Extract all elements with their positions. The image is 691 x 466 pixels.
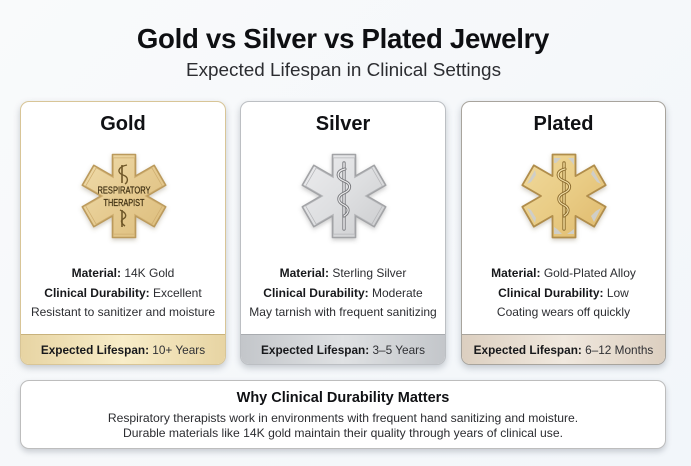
- panel: why clinical durability matters: [20, 380, 666, 449]
- panel: plated: [461, 101, 666, 365]
- icon: gold star of life badge: RESPIRATORY: [97, 184, 150, 196]
- text: clinical durability: Clinical Durability: Excellent: [44, 286, 202, 300]
- footer: expected lifespan: Expected Lifespan: 10+ Years: [41, 343, 205, 357]
- footer: expected lifespan: Expected Lifespan: 6–12 Months: [474, 343, 653, 357]
- subtitle: Expected Lifespan in Clinical Settings: [186, 60, 501, 81]
- panel: gold: [20, 101, 226, 365]
- icon: gold star of life badge: THERAPIST: [103, 197, 144, 209]
- text: note: Coating wears off quickly: [497, 305, 630, 319]
- text: material: Material: Gold-Plated Alloy: [491, 266, 636, 280]
- text: explanation: Respiratory therapists work in environments with frequent hand sanitizing and moisture.: [108, 411, 578, 425]
- text: explanation: Durable materials like 14K gold maintain their quality through years of clinical use.: [123, 426, 563, 440]
- text: clinical durability: Clinical Durability: Moderate: [263, 286, 423, 300]
- text: material: Material: Sterling Silver: [280, 266, 406, 280]
- title: Gold vs Silver vs Plated Jewelry: [137, 23, 549, 54]
- heading: plated: Plated: [533, 112, 594, 134]
- panel: silver: [240, 101, 446, 365]
- heading: gold: Gold: [100, 112, 146, 134]
- text: note: May tarnish with frequent sanitizing: [249, 305, 437, 319]
- text: explanation: [108, 411, 578, 440]
- heading: why clinical durability matters: Why Clinical Durability Matters: [237, 390, 449, 406]
- icon: silver star of life badge: [300, 154, 388, 242]
- icon: plated star of life badge with worn coating: [520, 153, 608, 243]
- text: note: Resistant to sanitizer and moisture: [31, 305, 215, 319]
- footer: expected lifespan: Expected Lifespan: 3–5 Years: [261, 343, 425, 357]
- icon: gold star of life badge: [80, 153, 168, 243]
- footer: expected lifespan: [241, 334, 445, 365]
- footer: expected lifespan: [462, 334, 665, 365]
- text: material: Material: 14K Gold: [72, 266, 174, 280]
- heading: silver: Silver: [316, 112, 370, 134]
- footer: expected lifespan: [21, 334, 225, 365]
- text: clinical durability: Clinical Durability: Low: [498, 286, 629, 300]
